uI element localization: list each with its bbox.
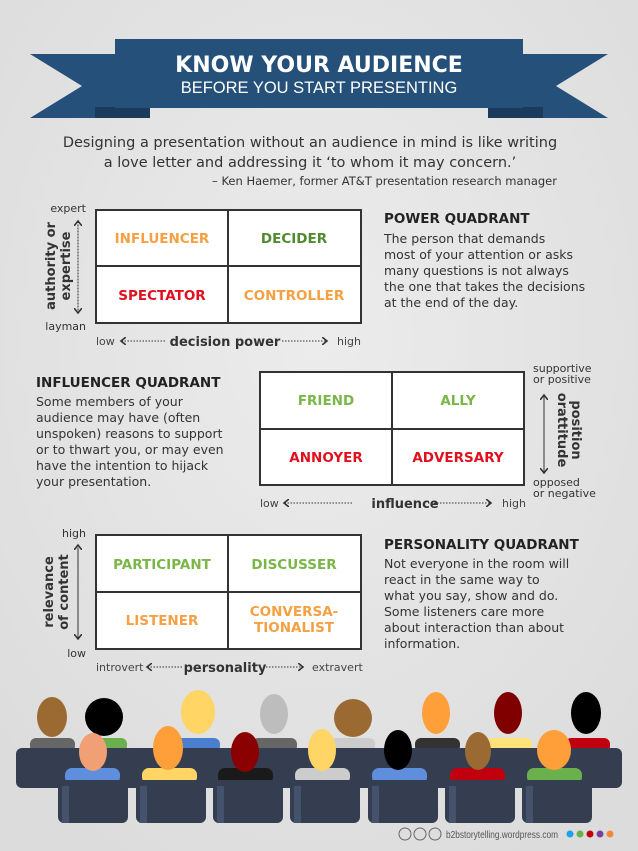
text: influencer quadrant: audience may have (often	[36, 410, 200, 425]
chart: personality quadrant	[42, 527, 363, 676]
chart: influencer quadrant: ALLY	[440, 393, 476, 409]
quote: a love letter and addressing it ‘to whom it may concern.’	[104, 155, 516, 171]
text: influencer quadrant: your presentation.	[36, 474, 151, 489]
text: personality quadrant	[384, 537, 580, 651]
chart: personality quadrant: of content	[57, 554, 72, 630]
front row chairs	[58, 780, 592, 823]
chart: personality quadrant: relevance	[42, 556, 57, 628]
text: influencer quadrant: have the intention to hijack	[36, 458, 209, 473]
footer	[399, 828, 614, 841]
chart: personality quadrant: high	[62, 527, 86, 540]
chart: personality quadrant: TIONALIST	[254, 620, 335, 636]
chart: power quadrant: expert	[50, 202, 87, 215]
chart: personality quadrant: PARTICIPANT	[113, 557, 212, 573]
text: influencer quadrant: or to thwart you, or may even	[36, 442, 224, 457]
quote	[63, 135, 557, 188]
chart: personality quadrant: introvert	[96, 661, 144, 674]
text: personality quadrant: Not everyone in the room will	[384, 556, 569, 571]
chart: personality quadrant: personality	[184, 661, 267, 676]
back row heads	[30, 690, 610, 752]
chart: power quadrant: authority or	[44, 221, 59, 310]
chart: power quadrant: low	[96, 335, 115, 348]
title: KNOW YOUR AUDIENCE	[175, 53, 463, 78]
chart: personality quadrant: extravert	[312, 661, 363, 674]
front row heads	[65, 726, 582, 784]
chart: power quadrant: high	[337, 335, 361, 348]
text: personality quadrant: about interaction than about	[384, 620, 564, 635]
text: personality quadrant: PERSONALITY QUADRANT	[384, 537, 580, 553]
chart: influencer quadrant: FRIEND	[298, 393, 354, 409]
text: influencer quadrant: Some members of your	[36, 394, 184, 409]
chart: influencer quadrant: or negative	[533, 487, 596, 500]
quote: Designing a presentation without an audience in mind is like writing	[63, 135, 557, 151]
chart: power quadrant: SPECTATOR	[118, 288, 206, 304]
back row chairs	[16, 748, 622, 788]
illustration: audience	[16, 690, 622, 823]
text: personality quadrant: information.	[384, 636, 460, 651]
chart: power quadrant: layman	[45, 320, 86, 333]
chart: influencer quadrant	[260, 362, 596, 512]
text: personality quadrant: what you say, show and do.	[384, 588, 558, 603]
text: influencer quadrant: INFLUENCER QUADRANT	[36, 375, 221, 391]
text: power quadrant: the one that takes the decisions	[384, 279, 585, 294]
chart: influencer quadrant: orattitude	[554, 393, 569, 467]
chart: influencer quadrant: or positive	[533, 373, 591, 386]
chart: influencer quadrant: ADVERSARY	[412, 450, 504, 466]
chart: power quadrant: CONTROLLER	[244, 288, 345, 304]
chart: personality quadrant: CONVERSA-	[250, 604, 338, 620]
chart: influencer quadrant: position	[568, 400, 583, 460]
chart: influencer quadrant: influence	[371, 497, 439, 512]
subtitle: BEFORE YOU START PRESENTING	[181, 79, 457, 97]
text: power quadrant: The person that demands	[383, 231, 545, 246]
text: power quadrant: POWER QUADRANT	[384, 211, 530, 227]
text: power quadrant: many questions is not always	[384, 263, 569, 278]
chart: influencer quadrant: high	[502, 497, 526, 510]
chart: personality quadrant: low	[67, 647, 86, 660]
title banner	[30, 39, 608, 118]
quote: – Ken Haemer, former AT&T presentation research manager	[212, 174, 557, 188]
text: personality quadrant: react in the same way to	[384, 572, 540, 587]
chart: power quadrant: INFLUENCER	[115, 231, 210, 247]
chart: power quadrant: DECIDER	[261, 231, 328, 247]
chart: power quadrant	[44, 202, 361, 350]
chart: influencer quadrant: ANNOYER	[289, 450, 363, 466]
chart: personality quadrant: LISTENER	[126, 613, 199, 629]
text: power quadrant: most of your attention or asks	[384, 247, 573, 262]
chart: influencer quadrant: supportive	[533, 362, 592, 375]
chart: power quadrant: expertise	[59, 231, 74, 300]
chart: power quadrant: decision power	[170, 335, 281, 350]
text: personality quadrant: Some listeners care more	[384, 604, 544, 619]
text: influencer quadrant: unspoken) reasons to support	[36, 426, 223, 441]
footer: b2bstorytelling.wordpress.com	[446, 830, 558, 841]
text: power quadrant: at the end of the day.	[384, 295, 518, 310]
chart: personality quadrant: DISCUSSER	[251, 557, 337, 573]
text: influencer quadrant	[36, 375, 224, 489]
chart: influencer quadrant: opposed	[533, 476, 580, 489]
chart: influencer quadrant: low	[260, 497, 279, 510]
text: power quadrant	[383, 211, 585, 310]
